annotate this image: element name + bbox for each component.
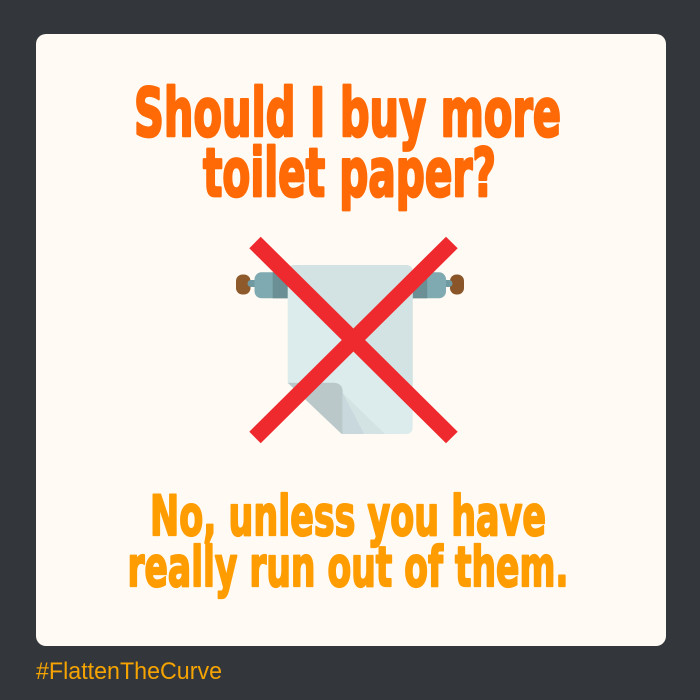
paper shaded upper section [289, 265, 413, 397]
paper sheet [288, 265, 413, 434]
hashtag: #FlattenTheCurve [36, 658, 222, 685]
left knob [236, 274, 250, 294]
answer text [128, 484, 568, 600]
panel: cream card [36, 34, 666, 646]
paper curled corner [288, 383, 343, 434]
heading: question [134, 74, 561, 212]
icon: toilet paper roll [236, 265, 464, 434]
curl fan [343, 393, 385, 434]
heading: question: toilet paper? [203, 134, 496, 212]
axle [248, 280, 452, 287]
right knob [450, 274, 464, 294]
roller [254, 272, 446, 298]
roller shaded section [273, 272, 427, 298]
icon: red cross [249, 237, 458, 443]
